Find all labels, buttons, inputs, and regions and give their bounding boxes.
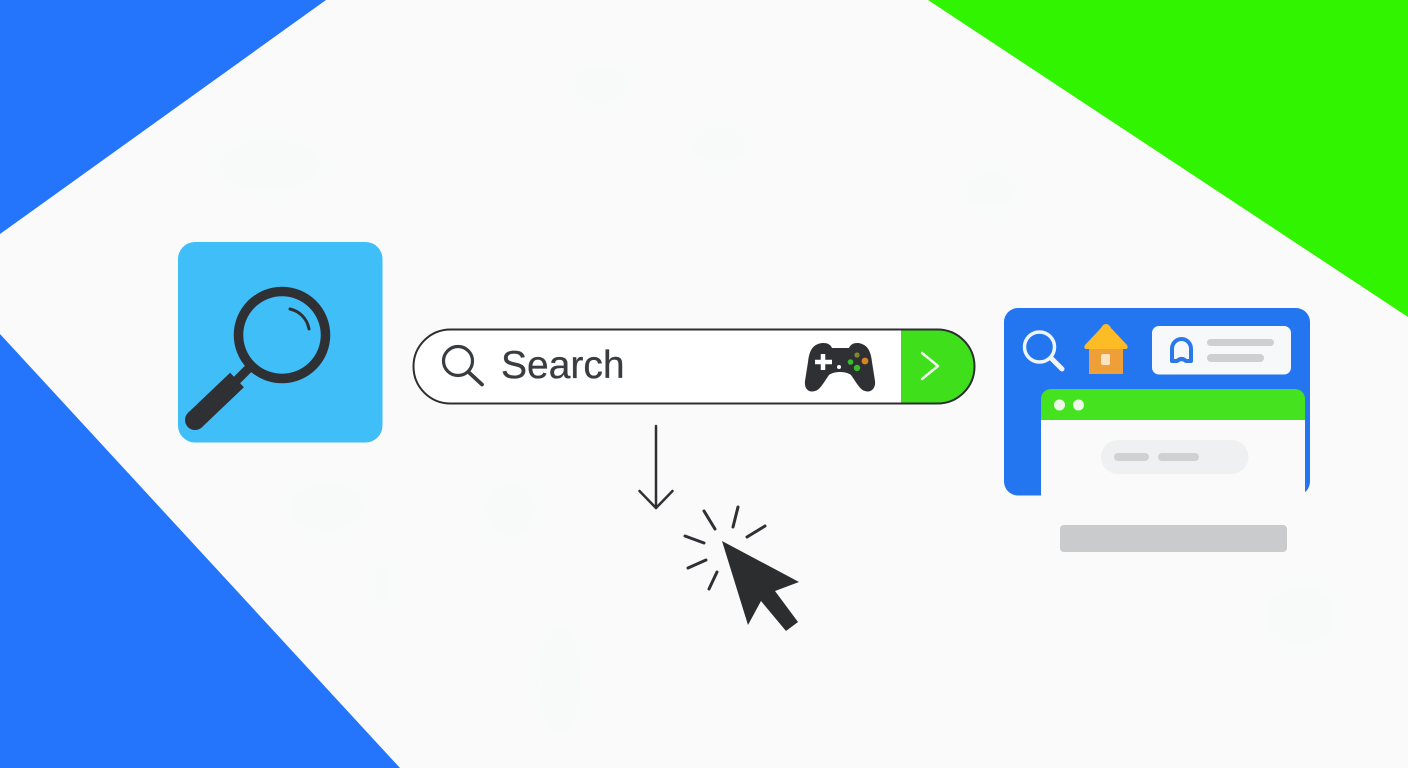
panel: website result [1004, 308, 1310, 568]
search pill [1101, 440, 1248, 474]
browser title bar [1041, 389, 1305, 420]
background: top-right green triangle [928, 0, 1408, 317]
user card [1152, 326, 1291, 374]
browser window [1041, 389, 1305, 568]
click rays [685, 507, 765, 589]
grey content bar [1060, 525, 1287, 552]
background: bottom-left blue triangle [0, 334, 400, 768]
icon: game controller [805, 343, 875, 392]
icon: search chevron [922, 353, 938, 379]
search button [901, 330, 974, 403]
icon: white search [1024, 332, 1062, 369]
search bar [414, 330, 974, 404]
icon: home [1084, 324, 1128, 374]
icon: click cursor [685, 507, 799, 631]
icon: magnifying glass tile [178, 242, 382, 442]
background: top-left blue triangle [0, 0, 326, 234]
blue site header [1004, 308, 1310, 496]
icon: search glass [444, 346, 482, 384]
background: faint ghost shapes [215, 63, 1338, 740]
search placeholder text: Search [501, 344, 625, 387]
arrow: down to cursor [640, 426, 672, 508]
